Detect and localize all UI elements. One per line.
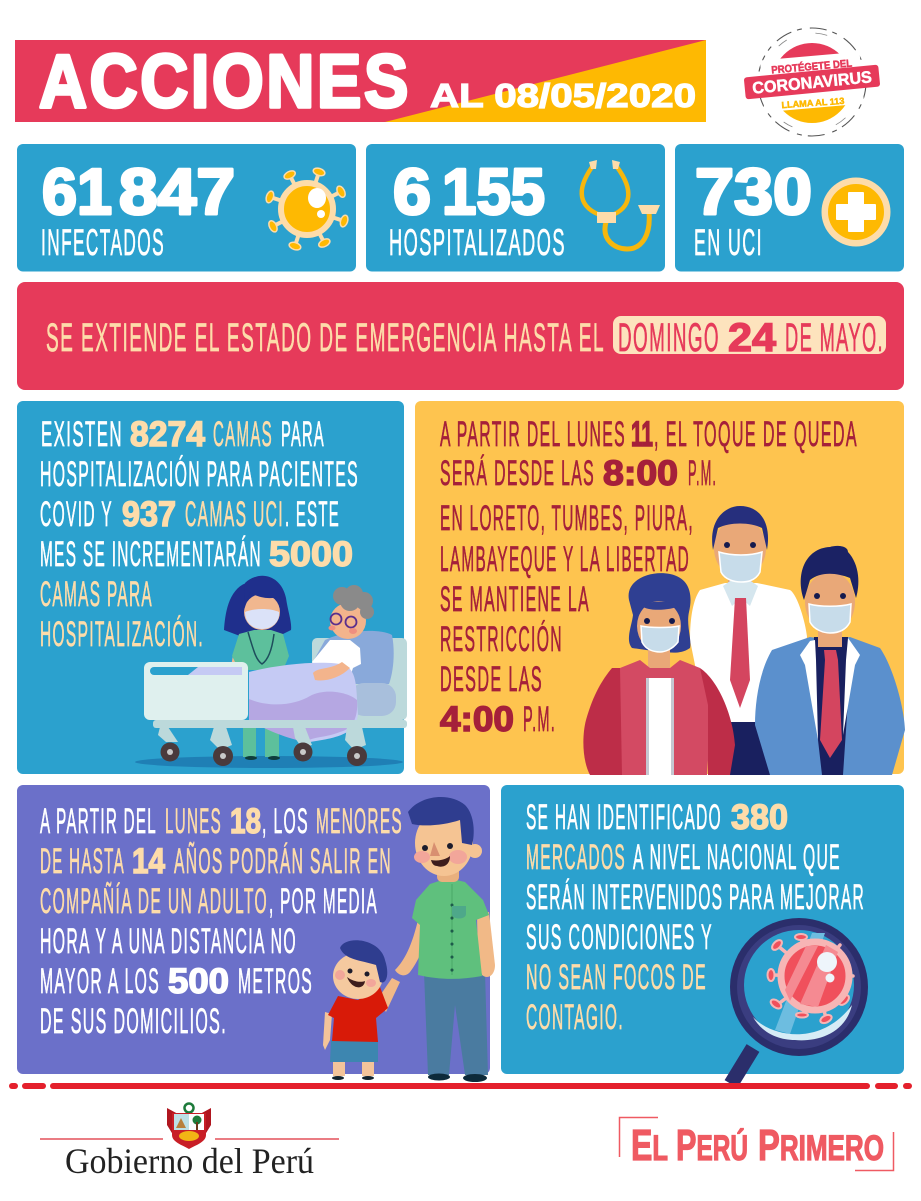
illustration: father and son: [323, 797, 495, 1082]
text: camas: MES SE INCREMENTARÁN: [40, 535, 262, 574]
text: toque de queda: SERÁ DESDE LAS: [440, 454, 595, 493]
illustration: three people with masks: [583, 506, 905, 775]
text: menores: 500: [168, 962, 229, 1001]
panel: menores: MENORES: [316, 802, 403, 841]
heading: acciones: ACCIONES: [39, 39, 411, 123]
text: menores: LUNES: [165, 802, 222, 841]
text: toque de queda: [440, 415, 858, 739]
text: mercados: CONTAGIO.: [526, 998, 624, 1037]
logo: gobierno del perú: [40, 1104, 339, 1181]
text: camas: HOSPITALIZACIÓN.: [40, 615, 204, 654]
panel: menores: [17, 785, 495, 1082]
text: camas: . ESTE: [285, 495, 340, 534]
highlighted date: DOMINGO: [618, 316, 720, 360]
logo: el perú primero: PRIMERO: [758, 1121, 884, 1170]
text: mercados: [526, 798, 865, 1037]
text: camas: EXISTEN: [41, 415, 123, 454]
text: toque de queda: 11: [631, 415, 653, 454]
stat card: en uci: [675, 144, 904, 272]
person: boy: [323, 940, 400, 1080]
text: menores: HORA Y A UNA DISTANCIA NO: [40, 922, 297, 961]
text: camas: [40, 415, 359, 654]
text: toque de queda: SE MANTIENE LA: [440, 580, 590, 619]
text: menores: COMPAÑÍA DE UN ADULTO: [40, 882, 268, 921]
panel: mercados: [501, 785, 904, 1084]
seal: protégete del coronavirus: [744, 28, 880, 136]
person: father: [395, 797, 495, 1082]
stat card: en uci: EN UCI: [694, 222, 763, 263]
number 6 155: 155: [442, 155, 545, 228]
title banner: [15, 39, 706, 123]
icon: stethoscope: [582, 160, 660, 249]
text: camas: 937: [122, 495, 176, 534]
icon: coat of arms: [167, 1104, 211, 1149]
person: woman: [583, 573, 735, 775]
text: menores: MAYOR A LOS: [40, 962, 160, 1001]
panel: toque de queda: [415, 401, 905, 775]
text: menores: , LOS: [262, 802, 309, 841]
text: toque de queda: RESTRICCIÓN: [440, 620, 563, 659]
text: menores: 18: [230, 802, 261, 841]
text: camas: 8274: [130, 415, 206, 454]
highlighted date: 24: [728, 316, 777, 360]
text: camas: PARA: [281, 415, 325, 454]
text: camas: 5000: [269, 535, 353, 574]
icon: plus: [822, 178, 890, 246]
seal: protégete del coronavirus: CORONAVIRUS: [752, 68, 873, 98]
panel: camas: [17, 401, 407, 774]
text: menores: METROS: [238, 962, 313, 1001]
text: toque de queda: P.M.: [688, 454, 717, 493]
text: menores: A PARTIR DEL: [40, 802, 157, 841]
person: right man: [755, 546, 905, 775]
logo: el perú primero: [620, 1118, 894, 1170]
number 730: 730: [695, 155, 812, 228]
person: middle man: [690, 506, 807, 775]
stat card: hospitalizados: HOSPITALIZADOS: [389, 222, 566, 263]
number 61 847: 847: [119, 155, 235, 228]
text: toque de queda: A PARTIR DEL LUNES: [440, 415, 626, 454]
date: AL 08/05/2020: [430, 77, 696, 114]
text: menores: DE HASTA: [40, 842, 125, 881]
number 61 847: 61: [42, 155, 112, 228]
text: camas: COVID Y: [40, 495, 113, 534]
number 6 155: [393, 155, 545, 228]
text: camas: CAMAS PARA: [40, 575, 153, 614]
stat card: infectados: INFECTADOS: [41, 222, 165, 263]
logo: el perú primero: EL: [631, 1121, 668, 1170]
stat card: infectados: [17, 144, 361, 272]
panel: camas: HOSPITALIZACIÓN PARA PACIENTES: [40, 455, 359, 494]
text: toque de queda: 8:00: [603, 454, 678, 493]
text: camas: CAMAS: [213, 415, 273, 454]
text: menores: DE SUS DOMICILIOS.: [40, 1002, 227, 1041]
text: menores: , POR MEDIA: [269, 882, 378, 921]
seal: protégete del coronavirus: LLAMA AL 113: [781, 96, 845, 110]
name: Gobierno del Perú: [65, 1141, 314, 1181]
text: toque de queda: 4:00: [440, 700, 514, 739]
icon: magnifying glass with virus: [730, 918, 868, 1084]
seal: protégete del coronavirus: PROTÉGETE DEL: [771, 56, 853, 77]
text: menores: [40, 802, 403, 1041]
stat card: hospitalizados: [366, 144, 665, 272]
text: mercados: 380: [731, 798, 788, 837]
illustration: nurse and patient in bed: [135, 576, 407, 768]
icon: virus: [253, 155, 361, 263]
logo: el perú primero: PERÚ: [676, 1121, 748, 1170]
number 6 155: 6: [393, 155, 431, 228]
text: mercados: NO SEAN FOCOS DE: [526, 958, 707, 997]
text: menores: 14: [132, 842, 165, 881]
panel: estado de emergencia: [17, 282, 904, 390]
text: toque de queda: P.M.: [523, 700, 556, 739]
text: toque de queda: DESDE LAS: [440, 660, 543, 699]
number 61 847: [42, 155, 235, 228]
panel: menores: AÑOS PODRÁN SALIR EN: [174, 842, 392, 881]
text: mercados: MERCADOS: [526, 838, 626, 877]
text: camas: CAMAS UCI: [185, 495, 284, 534]
divider line: [9, 1083, 912, 1089]
